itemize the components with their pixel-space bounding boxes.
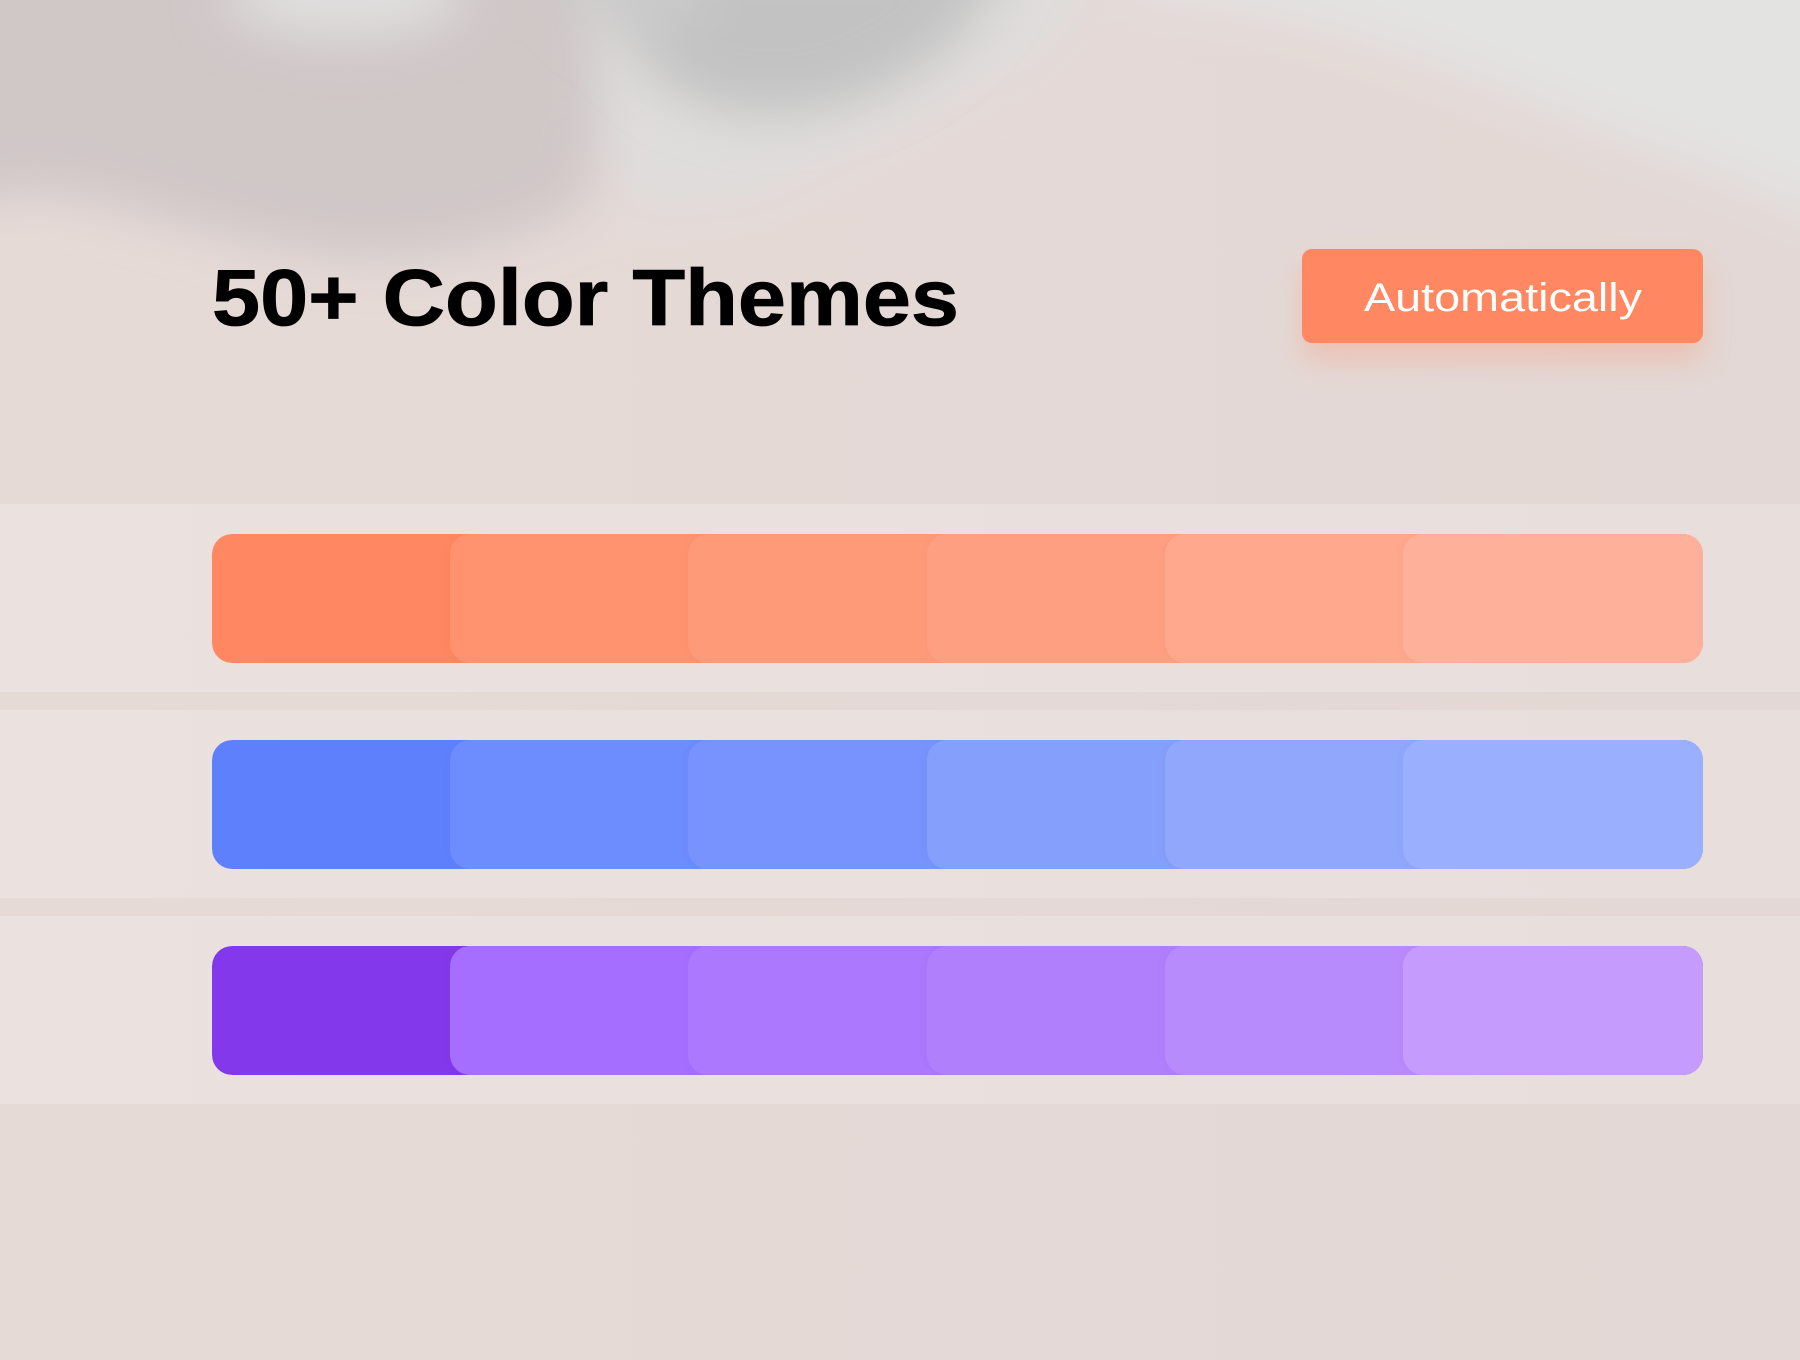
panel: theme row band 3: [0, 916, 1800, 1104]
badge: Automatically button: Automatically: [1364, 276, 1642, 320]
badge: Automatically button: [1302, 249, 1703, 343]
panel: theme row band 1: [0, 504, 1800, 692]
color bar: blue theme: [212, 740, 1703, 869]
title: 50+ Color Themes: [212, 253, 959, 342]
panel: theme row band 2: [0, 710, 1800, 898]
color bar: orange theme: [212, 534, 1703, 663]
color bar: purple theme: [212, 946, 1703, 1075]
